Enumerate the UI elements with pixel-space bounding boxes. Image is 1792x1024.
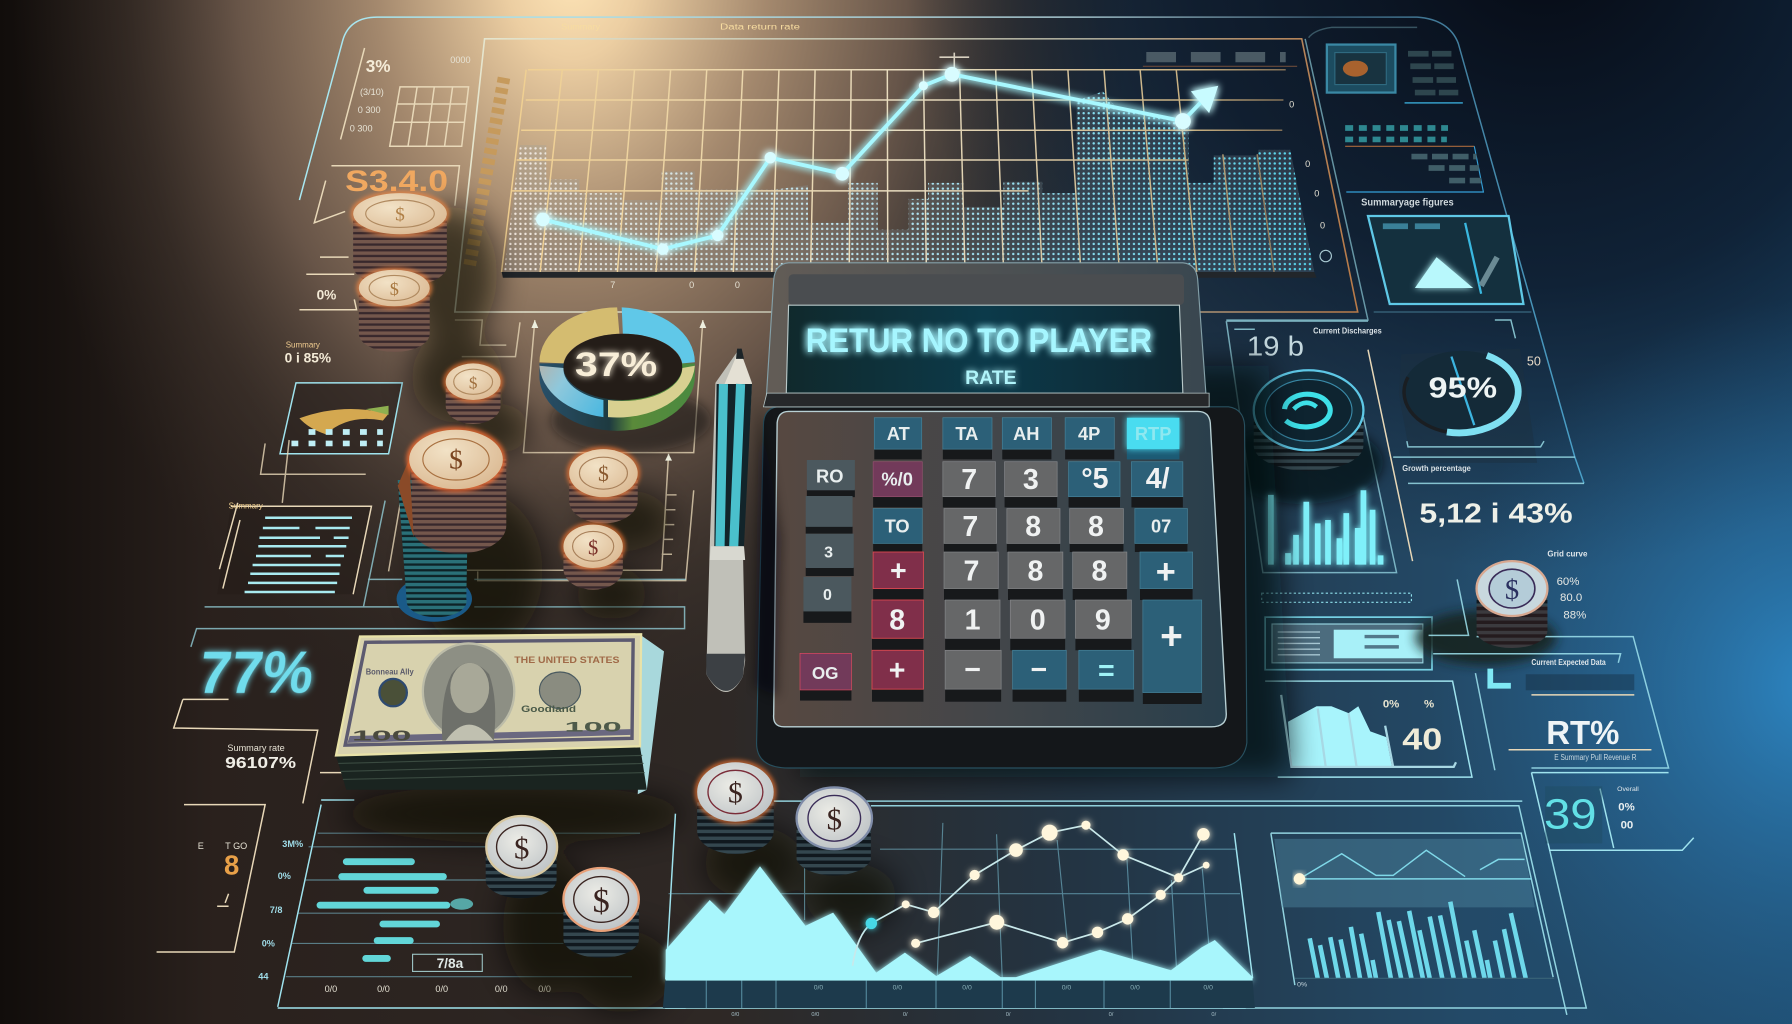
panel: horizontal bar chart: 0/0	[538, 984, 551, 994]
value text 5,12 i 43%: 5,12 i 43%	[1419, 497, 1573, 528]
panel: horizontal bar chart: 7/8	[270, 905, 282, 915]
panel: top left mini table	[341, 48, 471, 146]
main chart: axis labels and ticks: 7	[610, 280, 615, 290]
panel: area chart with value 40: 0%	[1383, 698, 1399, 710]
keys row 2: 4/	[1146, 463, 1170, 495]
panel: mini triangle chart	[1368, 216, 1531, 312]
coin stack 10: $	[593, 882, 610, 920]
panel: value 39	[1531, 773, 1694, 850]
key: tall plus	[1143, 600, 1202, 704]
panel: value 39: 0%	[1618, 801, 1635, 813]
bottom chart: axis band: 0/0	[962, 985, 972, 992]
banknote stack	[336, 634, 664, 794]
keys row 5: 1	[965, 605, 981, 637]
bottom chart: axis band: 0/	[903, 1012, 908, 1018]
coin stack 5	[569, 449, 638, 523]
panel: top right thumbnails: Summaryage figures	[1361, 198, 1454, 209]
calculator display: RATE	[965, 367, 1017, 389]
panel: RT%: E Summary Pull Revenue R	[1554, 753, 1637, 762]
calculator display: RETUR NO TO PLAYER	[806, 322, 1152, 360]
coin stack tall	[397, 430, 506, 622]
keys row 4: 7	[963, 556, 979, 588]
panel: return figure with dial	[1226, 321, 1397, 573]
keys row 3: TO	[885, 516, 910, 537]
main chart: trend line	[536, 67, 1218, 255]
coin stack 1: $	[395, 205, 405, 226]
outer dashboard frame	[299, 17, 1584, 483]
keys row 3	[873, 509, 1187, 552]
panel: summary value: 96107%	[225, 755, 296, 772]
coin stack 6: $	[588, 537, 598, 559]
value tag S3.4.0: 0%	[317, 287, 336, 302]
mini chart panel left	[280, 383, 402, 454]
secondary chart frame line	[1226, 39, 1368, 320]
keys left column: 0	[823, 587, 832, 604]
panel: cyan bar chart right	[1271, 490, 1381, 565]
keys row 6	[872, 650, 1134, 702]
value tag S3.4.0: 0 i 85%	[285, 350, 331, 365]
gauge: 95%: Growth percentage	[1402, 464, 1471, 473]
panel: horizontal bar chart: 0/0	[325, 984, 337, 994]
main chart: axis labels and ticks	[610, 53, 1331, 290]
keys row 3: 7	[962, 511, 978, 543]
value tag S3.4.0	[285, 165, 459, 365]
value tag S3.4.0: S3.4.0	[345, 165, 448, 198]
keys row 2: 7	[961, 464, 977, 496]
icon: pen	[706, 349, 782, 697]
keys row 2: 3	[1023, 464, 1039, 496]
panel: horizontal bar chart: 0/0	[377, 984, 390, 994]
bottom chart: axis band: 0/0	[1130, 985, 1140, 992]
panel: value 39: Overall	[1617, 786, 1639, 793]
connector arrowheads	[531, 320, 706, 461]
panel: top right thumbnails	[1309, 27, 1483, 209]
calculator display	[786, 305, 1183, 393]
panel: horizontal bar chart: 7/8a	[437, 956, 464, 971]
panel: screen widget	[1265, 617, 1432, 670]
panel: RT%: Current Expected Data	[1531, 658, 1606, 667]
keys row 6: −	[1031, 654, 1047, 686]
keys row 1: AH	[1013, 423, 1039, 444]
keys row 5: 0	[1030, 605, 1046, 637]
keys row 2: %/0	[881, 469, 913, 490]
banknote stack: Goodland	[521, 704, 576, 714]
panel: value 39: 39	[1544, 791, 1597, 838]
bottom chart: dotted lines	[853, 821, 1210, 966]
main chart: axis labels and ticks: 0	[735, 280, 740, 290]
keys row 5: 8	[889, 605, 905, 637]
keys row 1: RTP	[1135, 423, 1171, 444]
main chart: axis labels and ticks: 0	[689, 280, 694, 290]
value tag S3.4.0: Summary	[286, 340, 320, 349]
coin stack tall: $	[449, 445, 463, 475]
banknote stack: 100	[565, 719, 623, 734]
keys row 3: 8	[1025, 511, 1041, 543]
ruled strip	[1262, 593, 1411, 602]
panel: horizontal bar chart: 0/0	[495, 984, 508, 994]
panel: return figure with dial: Current Discharges	[1313, 327, 1382, 336]
panel: small figure: T GO	[225, 841, 247, 851]
panel: top left mini table: 3%	[366, 56, 390, 76]
shadow: calculator	[800, 366, 1291, 777]
keys row 3: 8	[1088, 511, 1104, 543]
panel: list lines left	[217, 502, 371, 594]
keys row 4: 8	[1091, 556, 1107, 588]
panel: horizontal bar chart	[258, 800, 686, 1008]
calculator	[757, 263, 1247, 768]
banknote stack: 100	[352, 729, 411, 745]
keys row 5: 9	[1095, 605, 1111, 637]
panel: list lines left: Summary	[229, 502, 263, 511]
donut chart 37%	[539, 307, 695, 431]
keys row 4	[873, 552, 1193, 600]
panel: horizontal bar chart: 44	[258, 971, 269, 981]
top small captions	[561, 23, 1297, 66]
bottom chart: axis band: 0/	[1006, 1012, 1011, 1018]
coin stack 8	[797, 787, 872, 875]
main chart: dotted bars	[504, 91, 1314, 272]
coin stack 6	[563, 525, 623, 590]
panel: top left mini table: 0 300	[358, 105, 381, 115]
keys row 4: +	[1156, 553, 1176, 591]
gauge: 95%: 95%	[1429, 373, 1497, 405]
main chart: grid	[501, 70, 1286, 272]
bottom chart: area	[666, 866, 1253, 981]
icon: round dial	[1223, 370, 1383, 504]
panel: coin side figures: 60%	[1557, 576, 1579, 588]
donut chart 37%: 37%	[575, 346, 657, 384]
coin shadow right	[1415, 610, 1557, 665]
bottom chart: axis band	[663, 981, 1255, 1018]
bottom chart: axis band: 0/0	[814, 985, 823, 992]
coin stack 1	[353, 193, 447, 287]
keys row 1: 4P	[1078, 423, 1100, 444]
ruler strip	[470, 78, 504, 265]
bottom chart: axis band: 0/	[1211, 1012, 1217, 1018]
panel: horizontal bar chart: 0%	[262, 938, 275, 948]
keys row 5	[872, 600, 1131, 650]
keys row 3: 07	[1151, 516, 1171, 537]
panel: top left mini table: 0000	[450, 55, 471, 65]
panel: top left mini table: (3/10)	[360, 87, 384, 97]
divider frame lines	[191, 501, 686, 647]
bottom chart: axis band: 0/0	[811, 1012, 819, 1018]
coin stack 7	[697, 762, 774, 854]
keys row 6: +	[889, 655, 905, 687]
panel: horizontal bar chart: 3M%	[282, 839, 303, 849]
keys row 2: °5	[1081, 463, 1109, 495]
keys row 1: AT	[887, 423, 910, 444]
panel: small figure	[157, 805, 265, 952]
coin stack 9	[486, 816, 557, 898]
keys left column	[800, 460, 855, 701]
donut shadow	[551, 389, 711, 453]
panel: bottom right line and bars chart	[774, 801, 1586, 1015]
panel: area chart with value 40	[1265, 681, 1472, 777]
keys row 1: TA	[955, 423, 978, 444]
panel: RT%: RT%	[1546, 715, 1619, 752]
coin stack 3	[446, 363, 501, 424]
panel: bottom right line and bars chart: 0%	[1297, 981, 1307, 988]
gauge: 95%	[1368, 320, 1584, 561]
coin stack 3: $	[469, 374, 478, 393]
coin stack shadows	[343, 206, 897, 1013]
coin stack 7: $	[728, 777, 743, 809]
main chart: axis labels and ticks: 0	[1314, 189, 1319, 199]
panel: summary value: Summary rate	[227, 743, 285, 753]
panel: top left mini table: 0 300	[350, 123, 373, 133]
panel: summary value	[174, 699, 343, 803]
coin stack 5: $	[598, 462, 609, 486]
panel: coin side figures: Grid curve	[1547, 550, 1588, 559]
calculator upper housing	[766, 263, 1207, 407]
banknote stack: THE UNITED STATES	[514, 655, 619, 665]
top small captions: Data return rate	[720, 23, 801, 32]
panel: value 39: 00	[1621, 820, 1633, 832]
icon: L marker	[1490, 669, 1511, 686]
keys row 6: =	[1098, 655, 1115, 687]
panel: coin side figures: 88%	[1563, 609, 1586, 621]
main chart: axis labels and ticks: 0	[1305, 159, 1310, 169]
panel: area chart with value 40: 40	[1402, 722, 1442, 757]
keys left column: OG	[812, 663, 838, 683]
panel: small figure: E	[198, 841, 204, 851]
bottom chart: axis band: 0/0	[1203, 985, 1213, 992]
big value 77%: 77%	[195, 639, 318, 706]
bottom chart panel	[665, 814, 1253, 1008]
coin stack 11: $	[1505, 575, 1519, 606]
coin stack 9: $	[514, 831, 529, 865]
connector lines centre left	[261, 320, 703, 581]
panel: horizontal bar chart: 0%	[278, 871, 291, 881]
key: tall plus: +	[1160, 615, 1183, 658]
keys row 2	[873, 462, 1183, 507]
main chart frame	[455, 39, 1358, 312]
coin stack 2: $	[390, 279, 399, 299]
keys row 1	[874, 418, 1179, 459]
calculator keypad plate	[774, 411, 1226, 727]
main chart: axis labels and ticks: 0	[1320, 221, 1325, 231]
calculator body base	[757, 407, 1247, 768]
panel: small figure: 8	[224, 849, 239, 880]
panel: coin side figures: 80.0	[1560, 592, 1582, 604]
bottom chart: axis band: 0/0	[893, 985, 902, 992]
panel: RT%	[1509, 658, 1651, 762]
coin stack 11	[1477, 561, 1547, 648]
main chart: baseline	[502, 272, 1317, 278]
top small captions: Summary	[561, 23, 600, 32]
panel: return figure with dial: 19 b	[1247, 330, 1304, 361]
banknote stack: Bonneau Ally	[366, 667, 414, 676]
keys row 4: +	[890, 556, 907, 588]
panel: area chart with value 40: %	[1424, 698, 1434, 710]
keys left column: RO	[816, 465, 843, 486]
main chart: axis labels and ticks: 0	[1289, 99, 1294, 109]
panel: horizontal bar chart: 0/0	[435, 984, 448, 994]
keys left column: 3	[824, 545, 833, 562]
connector lines right	[1429, 579, 1669, 770]
coin stack 8: $	[827, 803, 842, 837]
gauge: 95%: 50	[1527, 355, 1541, 369]
coin stack 2	[359, 270, 430, 352]
panel: coin side figures	[1547, 550, 1588, 621]
coin stack 10	[563, 868, 639, 958]
bottom chart: axis band: 0/0	[1062, 985, 1071, 992]
bottom chart: axis band: 0/0	[731, 1012, 739, 1018]
keys row 4: 8	[1027, 556, 1043, 588]
keys row 6: −	[964, 654, 981, 686]
bottom chart: axis band: 0/	[1109, 1012, 1114, 1018]
